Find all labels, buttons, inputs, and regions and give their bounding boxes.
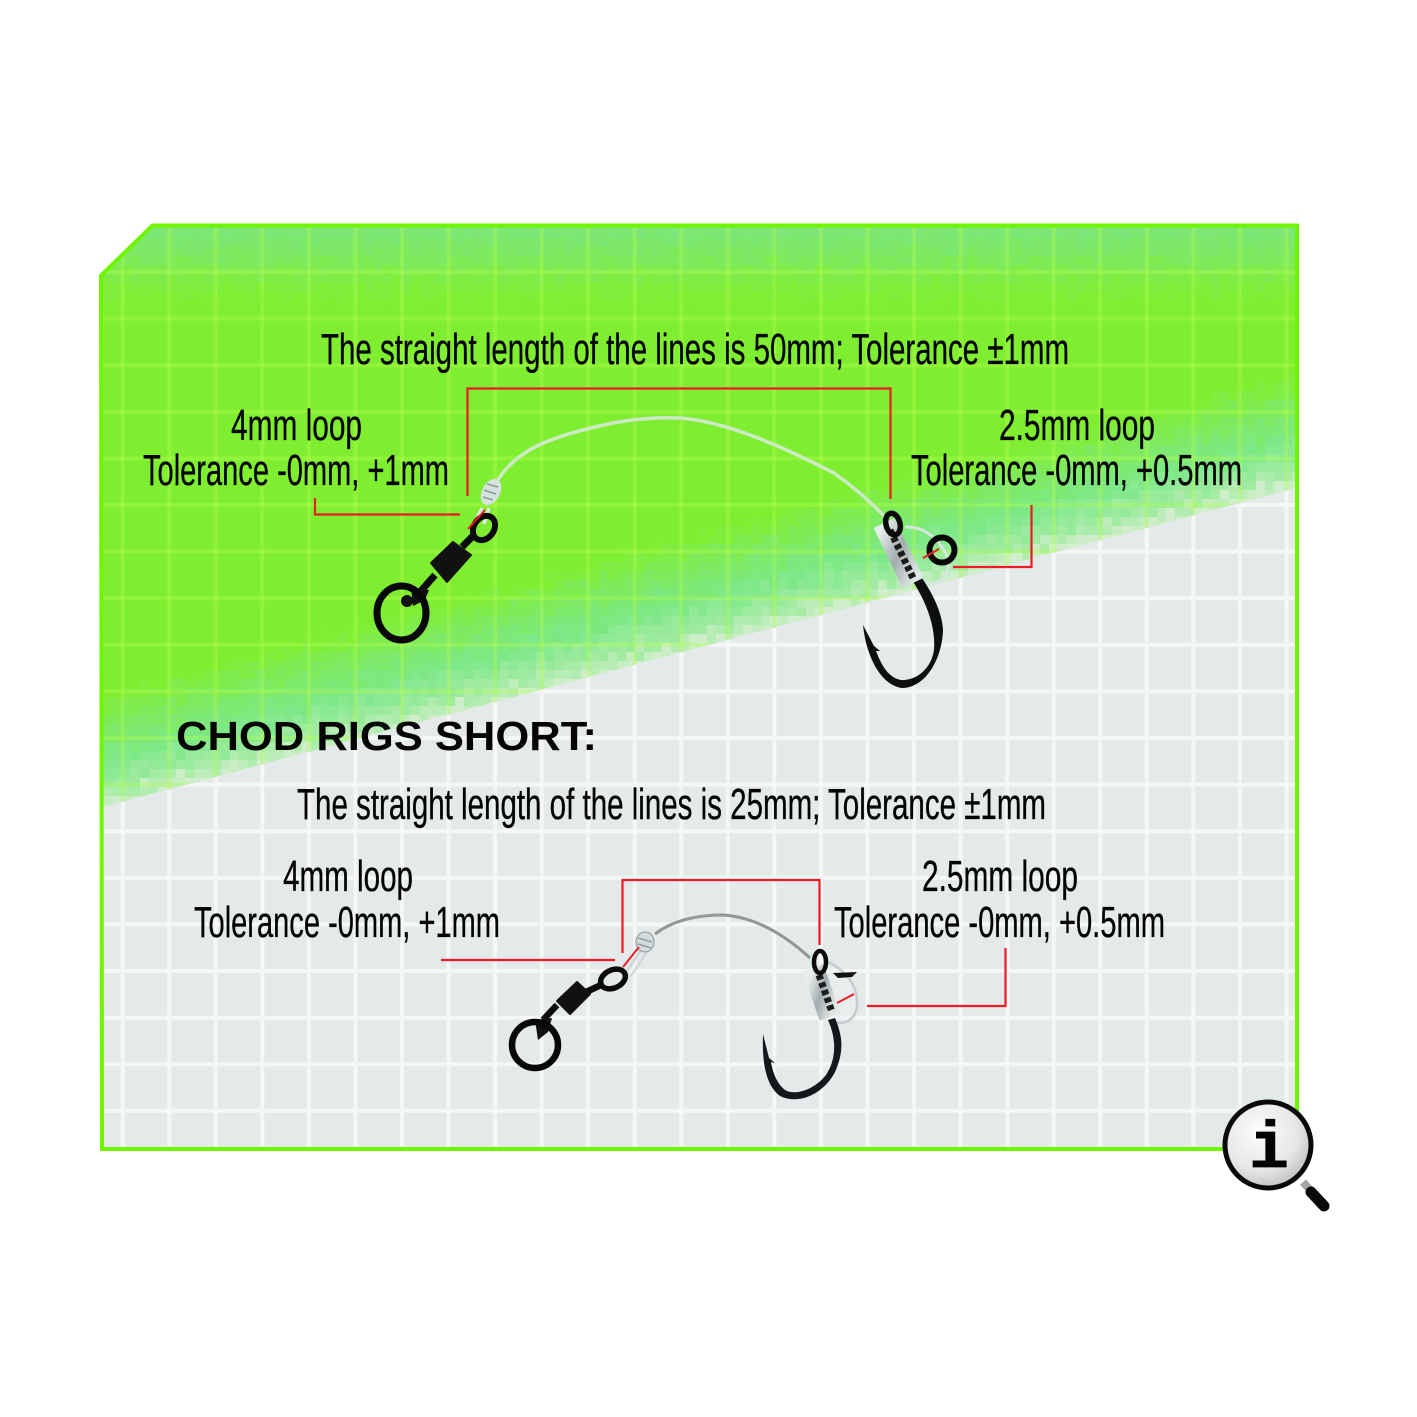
arrows xyxy=(468,510,939,558)
2.5mm ring marker xyxy=(930,538,954,562)
hook loop xyxy=(905,527,948,584)
dimension lines: top rig xyxy=(315,388,1032,567)
text: top rig 4mm loop xyxy=(143,401,449,495)
swivel xyxy=(401,512,500,607)
hook loop xyxy=(828,962,857,1023)
text: bottom rig 4mm loop xyxy=(194,852,500,947)
text: bottom rig 2.5mm loop xyxy=(834,852,1165,947)
hook xyxy=(863,578,943,688)
text: top rig 2.5mm loop xyxy=(911,401,1242,495)
icon: magnifying glass info xyxy=(1225,1102,1324,1206)
text: bottom rig 2.5mm loop: 2.5mm loop xyxy=(922,852,1078,901)
dimension lines: bottom rig xyxy=(441,880,1006,1006)
text: bottom rig 2.5mm loop: Tolerance -0mm, +0.5mm xyxy=(834,898,1165,947)
knot and swivel loop xyxy=(472,475,506,528)
ring xyxy=(512,1022,558,1068)
text: bottom rig 4mm loop: 4mm loop xyxy=(283,852,413,901)
swivel xyxy=(535,965,629,1040)
hook eye xyxy=(883,512,903,536)
whipping xyxy=(884,523,913,583)
panel: rig specification background xyxy=(99,224,1299,1151)
hook xyxy=(763,1018,841,1099)
line xyxy=(496,418,886,518)
whipping xyxy=(813,968,830,1017)
hook eye xyxy=(814,951,826,973)
bottom rig: line, swivel and hook xyxy=(512,915,857,1099)
line xyxy=(655,915,810,958)
text: top rig 4mm loop: Tolerance -0mm, +1mm xyxy=(143,446,449,495)
ring xyxy=(377,586,426,640)
heading: top rig length: The straight length of the lines is 50mm; Tolerance ±1mm xyxy=(321,325,1069,374)
text: bottom rig 4mm loop: Tolerance -0mm, +1mm xyxy=(194,898,500,947)
text: bottom rig length: The straight length of the lines is 25mm; Tolerance ±1mm xyxy=(297,780,1046,829)
barb tag xyxy=(833,972,857,978)
text: top rig 2.5mm loop: Tolerance -0mm, +0.5mm xyxy=(911,446,1242,495)
text: top rig 4mm loop: 4mm loop xyxy=(231,401,362,450)
icon: magnifying glass info: i xyxy=(1249,1112,1289,1187)
arrows xyxy=(623,947,854,1003)
heading: chod rigs short: CHOD RIGS SHORT: xyxy=(176,713,597,759)
top rig: line, swivel and hook xyxy=(377,418,954,688)
text: top rig 2.5mm loop: 2.5mm loop xyxy=(999,401,1155,450)
knot and swivel loop xyxy=(625,932,654,976)
